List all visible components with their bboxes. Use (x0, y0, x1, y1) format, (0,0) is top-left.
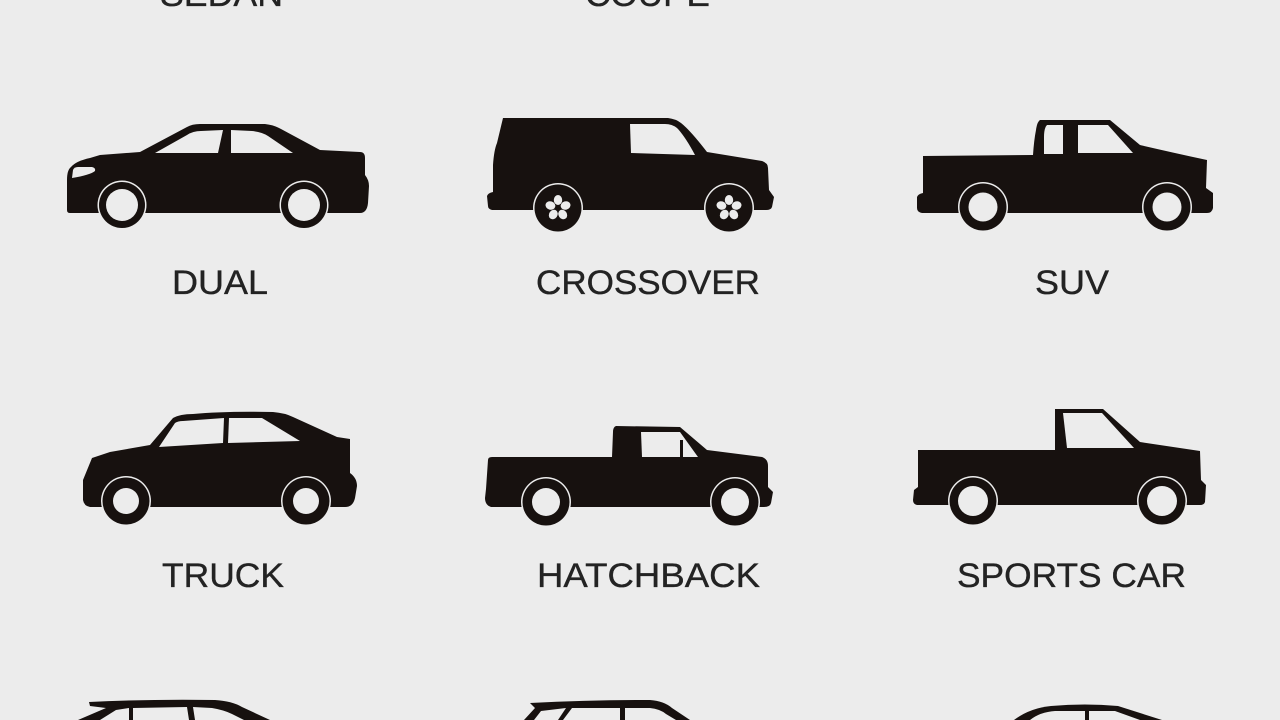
icon: crossover van silhouette (487, 118, 774, 233)
icon: cropped car, bottom centre (524, 700, 690, 720)
icon: cropped car, bottom right (1014, 704, 1162, 720)
icon: cropped car, bottom left (78, 700, 270, 720)
label: dual: DUAL (172, 264, 268, 302)
label: truck: TRUCK (162, 557, 284, 595)
icon: sports car pickup silhouette (913, 409, 1206, 526)
label: hatchback: HATCHBACK (537, 557, 760, 595)
icon: truck (hatch car) silhouette (83, 412, 357, 526)
label: crossover: CROSSOVER (536, 264, 760, 302)
icon: hatchback pickup silhouette (485, 426, 773, 527)
label: sports car: SPORTS CAR (957, 557, 1186, 595)
icon: suv pickup silhouette (917, 120, 1213, 232)
icon: dual car silhouette (67, 124, 369, 230)
label: suv: SUV (1035, 264, 1109, 302)
